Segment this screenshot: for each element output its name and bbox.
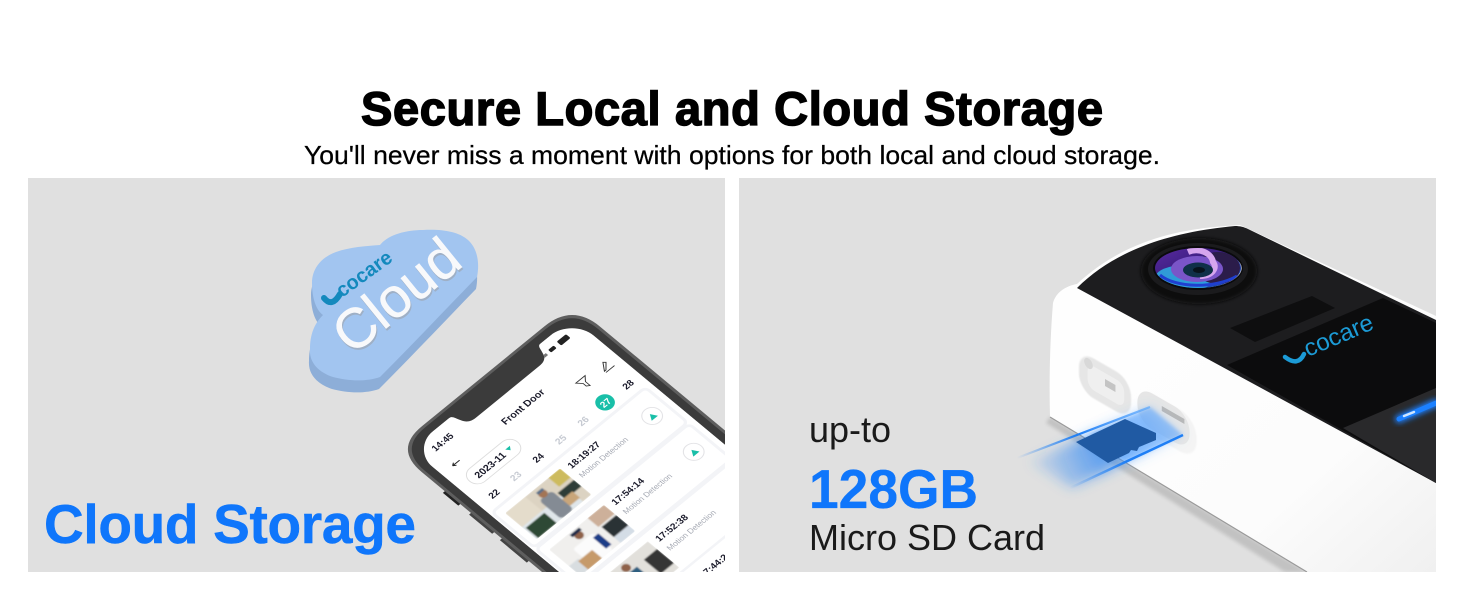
- phone frame: [408, 315, 725, 572]
- play button 2: [682, 443, 704, 461]
- panel: cloud storage: [28, 178, 725, 572]
- event card 2: [536, 424, 725, 572]
- cloud logo text: cocare: [332, 247, 397, 302]
- status bar time: 14:45: [429, 431, 457, 454]
- lens: [1141, 238, 1257, 304]
- micro sd card: [1076, 419, 1156, 463]
- blue led: [1399, 403, 1436, 419]
- title: Secure Local and Cloud Storage: [361, 82, 1103, 135]
- time 3: 17:52:38: [653, 513, 691, 544]
- panel: micro sd storage: [739, 178, 1436, 572]
- event card 1: [492, 387, 688, 548]
- sensor window: [1230, 296, 1335, 342]
- phone bezel: [412, 318, 725, 572]
- black camera face: [1077, 226, 1436, 483]
- up-to label: up-to: [809, 409, 891, 450]
- time 2: 17:54:14: [609, 476, 648, 507]
- usb slot: [1079, 350, 1131, 420]
- filter icon: [574, 374, 591, 386]
- led band: [1343, 388, 1436, 483]
- time 1: 18:19:27: [565, 440, 603, 471]
- side buttons: [443, 491, 529, 563]
- cloud word: Cloud: [320, 225, 472, 365]
- phone screen: [424, 328, 725, 572]
- date row: 28: [620, 378, 637, 392]
- label 2: Motion Detection: [621, 472, 674, 516]
- light beams: [1017, 407, 1183, 488]
- sd slot: [1137, 385, 1197, 461]
- event card 4 time: 17:44:24: [697, 549, 736, 580]
- infographic canvas: [28, 90, 1436, 572]
- date row: 23: [508, 470, 525, 484]
- cloud storage label: Cloud Storage: [44, 493, 416, 555]
- brand logo mark: [1285, 354, 1304, 361]
- date row: 25: [553, 433, 570, 447]
- brand logo: cocare: [1300, 309, 1378, 363]
- date row: 22: [486, 488, 503, 501]
- play button 1: [641, 407, 663, 425]
- micro sd card label: Micro SD Card: [809, 517, 1045, 558]
- label 3: Motion Detection: [665, 509, 718, 552]
- thumbnail 1: [505, 468, 592, 539]
- logo band: [1227, 298, 1436, 483]
- app header: [432, 334, 634, 499]
- date row: [488, 380, 634, 499]
- doorbell camera: [1017, 225, 1436, 572]
- month pill: [466, 439, 522, 484]
- screen heading: Front Door: [499, 387, 548, 427]
- status icons: [544, 334, 570, 358]
- date row: 27: [598, 396, 615, 410]
- doorbell body: [1050, 225, 1436, 572]
- date row: 24: [530, 451, 548, 465]
- month pill: 2023-11: [473, 451, 509, 481]
- phone: [408, 315, 725, 572]
- event card 3: [596, 466, 725, 572]
- ground shadow: [1046, 417, 1307, 572]
- thumbnail 2: [549, 505, 635, 576]
- speaker: [481, 374, 515, 401]
- back arrow: [452, 460, 460, 466]
- cloud word shadow: Cloud: [321, 227, 473, 367]
- label 1: Motion Detection: [577, 436, 630, 479]
- edit icon: [602, 362, 615, 373]
- cloud logo mark: [324, 294, 340, 302]
- icon: ucocare cloud: [309, 225, 478, 392]
- date row: 26: [575, 415, 592, 429]
- subtitle: You'll never miss a moment with options for both local and cloud storage.: [304, 140, 1160, 170]
- thumbnail 3: [610, 542, 679, 572]
- capacity figure: 128GB: [809, 458, 978, 520]
